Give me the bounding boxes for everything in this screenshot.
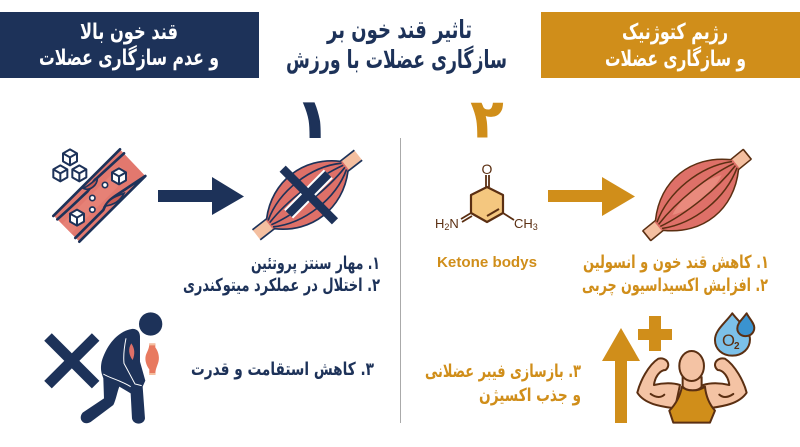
panel: right header: [541, 12, 800, 78]
text: Ketone bodys: Ketone bodys: [437, 254, 537, 271]
text: left list items 1 and 2: ۱. مهار سنتز پروتئین: [251, 253, 380, 274]
number 2: ۲: [471, 89, 503, 150]
panel: right header: رژیم کتوژنیک: [622, 20, 728, 45]
icon: up arrow: [602, 328, 640, 423]
icon: crossed out muscle: [240, 135, 374, 255]
text: right list item 3: ۳. بازسازی فیبر عضلانی: [425, 361, 581, 382]
icon: ketone molecule: 3: [533, 222, 538, 232]
icon: ketone molecule: CH: [514, 216, 533, 231]
icon: ketone molecule: [435, 161, 538, 232]
icon: tired person with weak muscle: [48, 312, 162, 424]
panel: left header: [0, 12, 259, 78]
icon: healthy muscle: [629, 133, 765, 257]
vertical divider: [400, 138, 401, 423]
arrow: gold: [548, 177, 635, 216]
text: right list items 1 and 2: [582, 252, 769, 296]
text: left list item 3: ۳. کاهش استقامت و قدرت: [191, 359, 374, 380]
icon: X mark: [48, 337, 96, 385]
arrow: navy: [158, 177, 244, 215]
title: سازگاری عضلات با ورزش: [286, 45, 507, 75]
title: [286, 15, 507, 75]
text: right list item 3: و جذب اکسیژن: [479, 385, 581, 406]
icon: ketone molecule: N: [449, 216, 459, 231]
icon: ketone molecule: O: [482, 161, 493, 177]
icon: oxygen drop: 2: [734, 341, 740, 352]
icon: oxygen drop: O: [722, 331, 735, 350]
title: تاثیر قند خون بر: [326, 15, 472, 45]
icon: ketone molecule: H: [435, 216, 444, 231]
text: left list items 1 and 2: [183, 253, 380, 296]
icon: oxygen drop: [715, 313, 754, 356]
icon: ketone molecule: 2: [444, 222, 449, 232]
panel: left header: و عدم سازگاری عضلات: [39, 44, 219, 71]
panel: right header: و سازگاری عضلات: [605, 45, 746, 72]
icon: blood vessel with sugar cubes: [53, 149, 145, 242]
icon: strong man with oxygen drop: [637, 313, 754, 423]
icon: plus: [638, 316, 672, 351]
text: right list item 3: [425, 361, 581, 406]
text: left list items 1 and 2: ۲. اختلال در عملکرد میتوکندری: [183, 275, 380, 296]
number 1: ۱: [297, 89, 329, 150]
left header line 1: قند خون بالا: [80, 20, 178, 45]
